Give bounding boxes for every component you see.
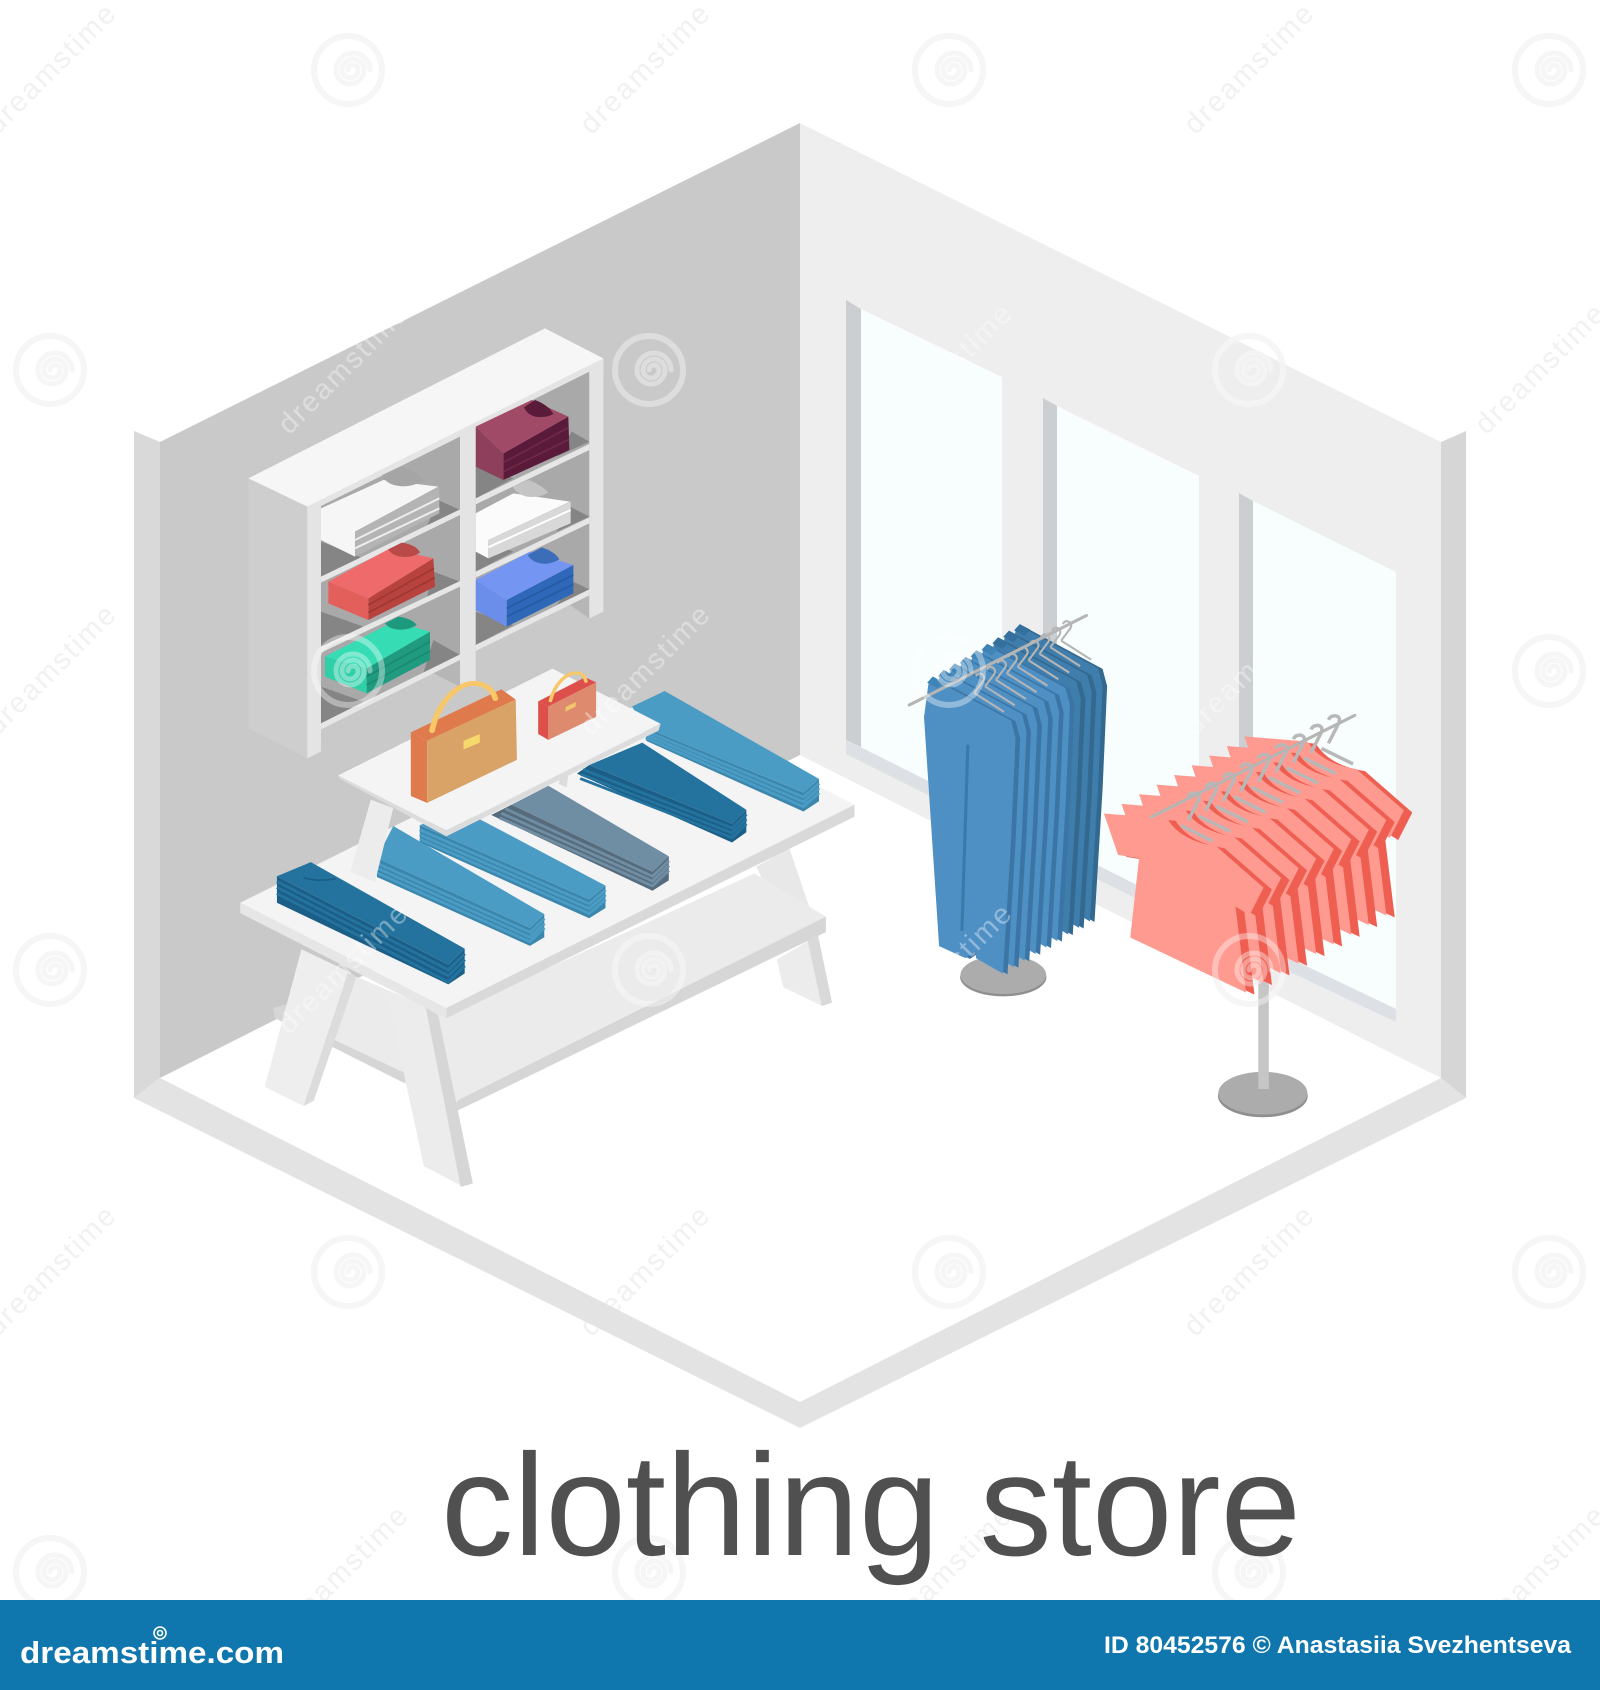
- maroon shirt stack: [476, 400, 569, 480]
- room shell: walls and floor edge: [134, 123, 1466, 1428]
- watermark: translucent white overlay: dreamstime: [876, 897, 1020, 1041]
- footer logo spiral: [154, 1627, 166, 1639]
- jeans stack 6: [632, 691, 819, 812]
- shelf back right: [476, 372, 589, 645]
- shelf surfaces: [321, 432, 589, 723]
- clothing racks: [909, 615, 1412, 1117]
- upper tier edge: [338, 724, 661, 836]
- green shirt stack: [325, 617, 430, 693]
- white shirt stack right: [476, 480, 571, 558]
- left front leg: [265, 949, 357, 1106]
- footer logo: dreamstime.com: [20, 1635, 284, 1670]
- watermark: grey spirals and wordmarks on white: dreamstime: [272, 1499, 416, 1643]
- watermark: translucent white overlay: dreamstime: [272, 297, 416, 441]
- upper tier top: [338, 669, 661, 830]
- upper tier leg: [350, 770, 569, 882]
- window 1: [846, 300, 1002, 832]
- image id and credit: ID 80452576 © Anastasiia Svezhentseva: [1104, 1632, 1572, 1659]
- jeans stack 4 grey: [491, 786, 669, 891]
- watermark: grey spirals and wordmarks on white: dreamstime: [876, 1499, 1020, 1643]
- watermark: translucent white overlay: dreamstime: [574, 598, 718, 742]
- right wall end cap: [1441, 431, 1466, 1098]
- table top side edges: [240, 903, 446, 1018]
- window 2: [1043, 398, 1199, 930]
- window 3: [1239, 493, 1396, 1022]
- watermark: grey spirals and wordmarks on white: dreamstime: [574, 0, 718, 141]
- watermark: translucent white overlay: dreamstime: [1178, 598, 1322, 742]
- shelf back left: [321, 437, 460, 723]
- watermark: translucent white overlay: dreamstime: [272, 897, 416, 1041]
- right wall: [800, 123, 1441, 1078]
- left wall end cap: [134, 431, 160, 1098]
- jeans stack 5: [577, 743, 746, 843]
- blue shirt stack: [476, 547, 573, 627]
- watermark: grey spirals and wordmarks on white: dreamstime: [574, 1199, 718, 1343]
- watermark: grey spirals and wordmarks on white: dreamstime: [1178, 0, 1322, 141]
- red shirt stack: [328, 543, 435, 620]
- table top: [240, 700, 854, 1008]
- small red bag: [538, 673, 596, 740]
- watermark: grey spirals and wordmarks on white: dreamstime: [1178, 1199, 1322, 1343]
- jeans stack 2: [377, 826, 544, 946]
- shelf side panel: [248, 478, 307, 758]
- rack of coral t-shirts: [1104, 736, 1412, 995]
- wall shelving unit with folded shirts: [248, 328, 603, 758]
- floor edge: [134, 1078, 1466, 1428]
- jeans stack 1: [277, 862, 465, 984]
- pants hangers and rail: [909, 615, 1091, 712]
- lower shelf panel: [332, 874, 826, 1101]
- rack of blue pants: [924, 624, 1107, 974]
- big orange bag: [411, 683, 517, 803]
- shelf posts: [307, 358, 603, 758]
- watermark: translucent white overlay: dreamstime: [876, 297, 1020, 441]
- footer band: [0, 1600, 1600, 1690]
- white shirt stack: [321, 467, 439, 557]
- table rear leg: [757, 848, 810, 922]
- shirt stand base: [1218, 1072, 1308, 1117]
- windows: [846, 300, 1396, 1022]
- centre front leg: [387, 996, 473, 1187]
- under shelf shadows: [433, 595, 589, 687]
- display table: [240, 669, 854, 1187]
- pants stand base: [960, 955, 1046, 996]
- shirt hangers and rail: [1151, 715, 1355, 841]
- lower shelf back edge: [273, 1004, 406, 1084]
- lower shelf front edge: [457, 917, 826, 1111]
- left wall: [160, 123, 800, 1078]
- shirt stand pole: [1258, 979, 1269, 1089]
- jeans stack 3: [420, 808, 606, 918]
- shelf top board: [248, 328, 603, 507]
- title: clothing store: [441, 1424, 1301, 1586]
- shelf boards: [321, 444, 589, 729]
- right front leg: [777, 934, 832, 1006]
